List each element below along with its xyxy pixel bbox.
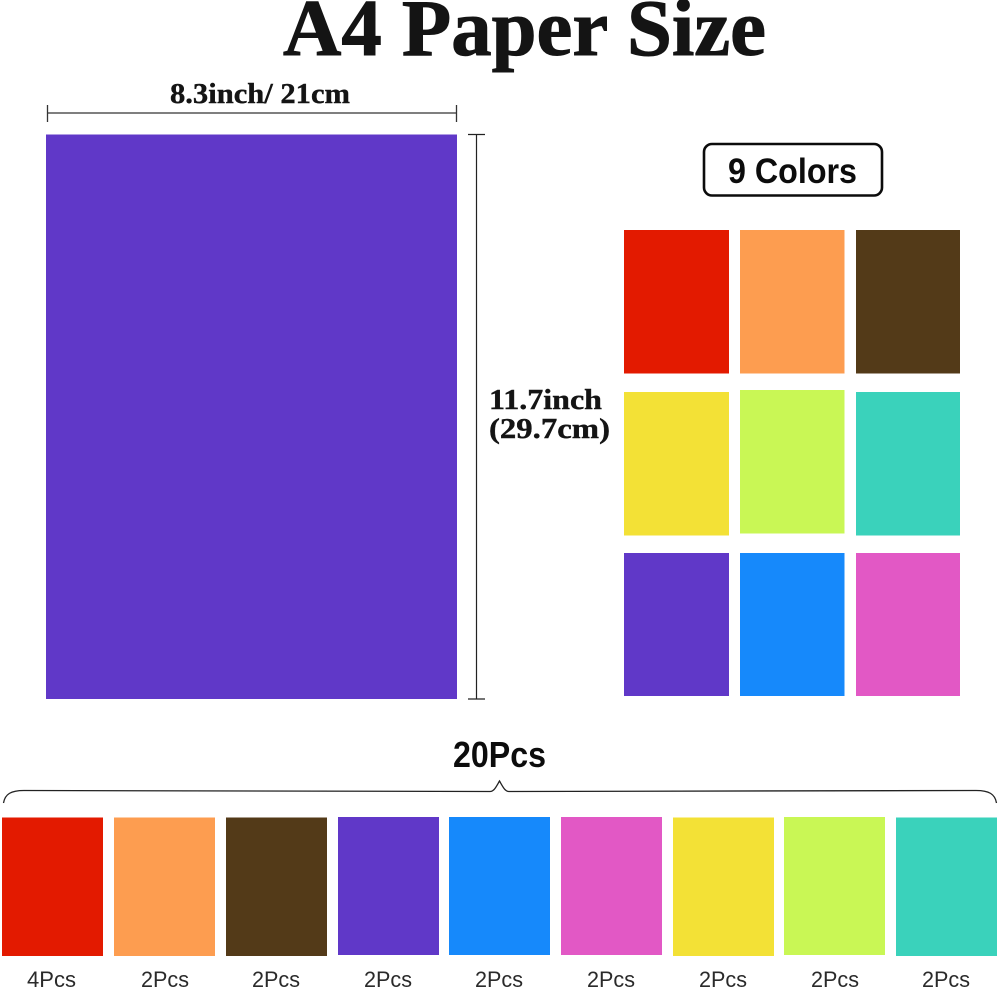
badge: 9 Colors xyxy=(704,144,882,196)
quantity labels xyxy=(27,967,970,989)
large purple A4 sheet xyxy=(46,134,457,699)
height dimension: 11.7inch xyxy=(489,384,602,416)
width dimension xyxy=(48,78,456,122)
brace xyxy=(4,781,996,803)
heading: 20Pcs: 20Pcs xyxy=(453,734,546,775)
height dimension xyxy=(468,134,610,699)
width dimension: 8.3inch/ 21cm xyxy=(170,78,350,110)
quantity swatch row xyxy=(2,817,997,956)
height dimension: (29.7cm) xyxy=(489,413,610,445)
colour swatch grid xyxy=(624,230,960,696)
badge: 9 Colors: 9 Colors xyxy=(728,152,857,191)
